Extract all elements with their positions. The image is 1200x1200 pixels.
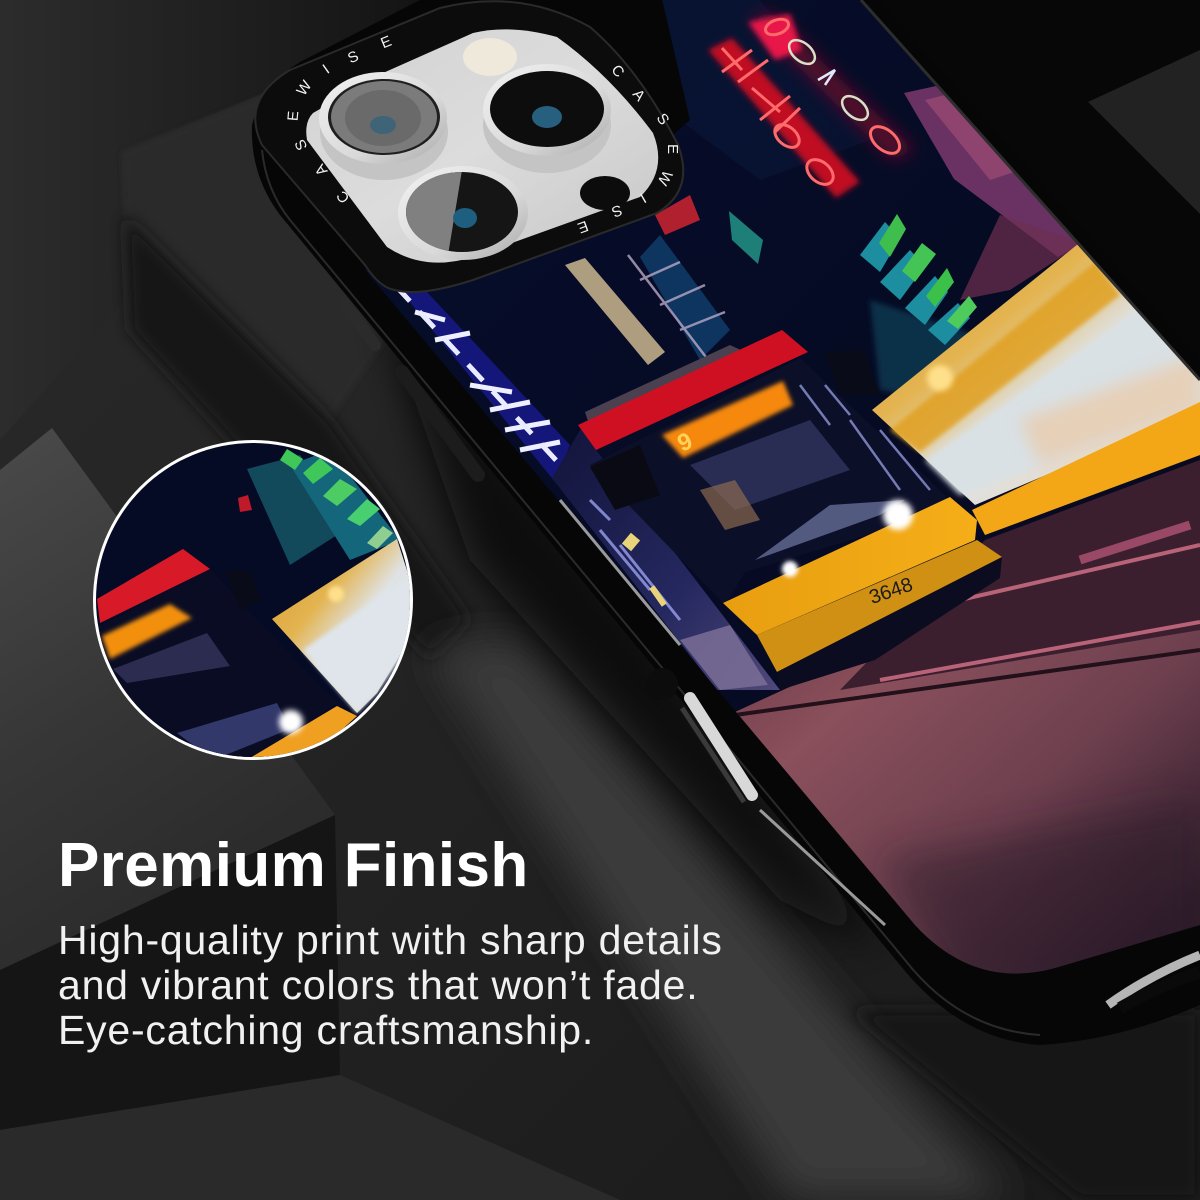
heading: Premium Finish	[58, 831, 529, 900]
brand lettering: W	[293, 77, 316, 99]
brand lettering: I	[320, 61, 333, 78]
brand lettering: S	[345, 48, 361, 67]
brand lettering: E	[285, 110, 302, 122]
brand lettering: S	[609, 201, 624, 220]
blue neon stripes	[398, 292, 570, 482]
printed artwork: night city and tram	[365, 0, 1200, 974]
tram	[0, 0, 1002, 690]
sensor	[580, 176, 630, 210]
camera island	[255, 1, 683, 292]
brand lettering: S	[653, 110, 672, 128]
magnified detail circle	[90, 440, 420, 770]
brand lettering: I	[637, 189, 649, 206]
body copy	[58, 917, 723, 1053]
brand lettering: A	[312, 161, 331, 179]
brand lettering: E	[664, 144, 681, 154]
light trails	[872, 240, 1200, 535]
fleet number: 3648	[866, 574, 916, 609]
body copy: High-quality print with sharp details	[58, 917, 723, 963]
text block	[58, 831, 723, 1053]
lens: right	[483, 64, 611, 173]
neon sign	[708, 12, 915, 198]
green and teal building lights	[729, 211, 977, 345]
lens: bottom	[398, 160, 528, 260]
brand lettering: A	[629, 86, 648, 105]
brand lettering: E	[575, 217, 590, 236]
upper building tones	[640, 0, 1083, 400]
brand lettering	[285, 33, 681, 236]
brand lettering: C	[333, 187, 353, 206]
glass window grid	[565, 195, 730, 365]
side buttons	[345, 305, 1200, 1008]
body copy: Eye-catching craftsmanship.	[58, 1007, 594, 1053]
brand lettering: W	[653, 167, 675, 189]
body copy: and vibrant colors that won’t fade.	[58, 962, 698, 1008]
lens: left	[319, 72, 448, 180]
road	[735, 460, 1200, 1000]
brand lettering: C	[608, 62, 628, 81]
flash	[463, 38, 517, 76]
brand lettering: E	[378, 33, 394, 52]
brand lettering: S	[292, 137, 311, 153]
phone shell	[252, 0, 1200, 1045]
phone body	[252, 0, 1200, 1045]
tram: 9	[673, 427, 697, 457]
